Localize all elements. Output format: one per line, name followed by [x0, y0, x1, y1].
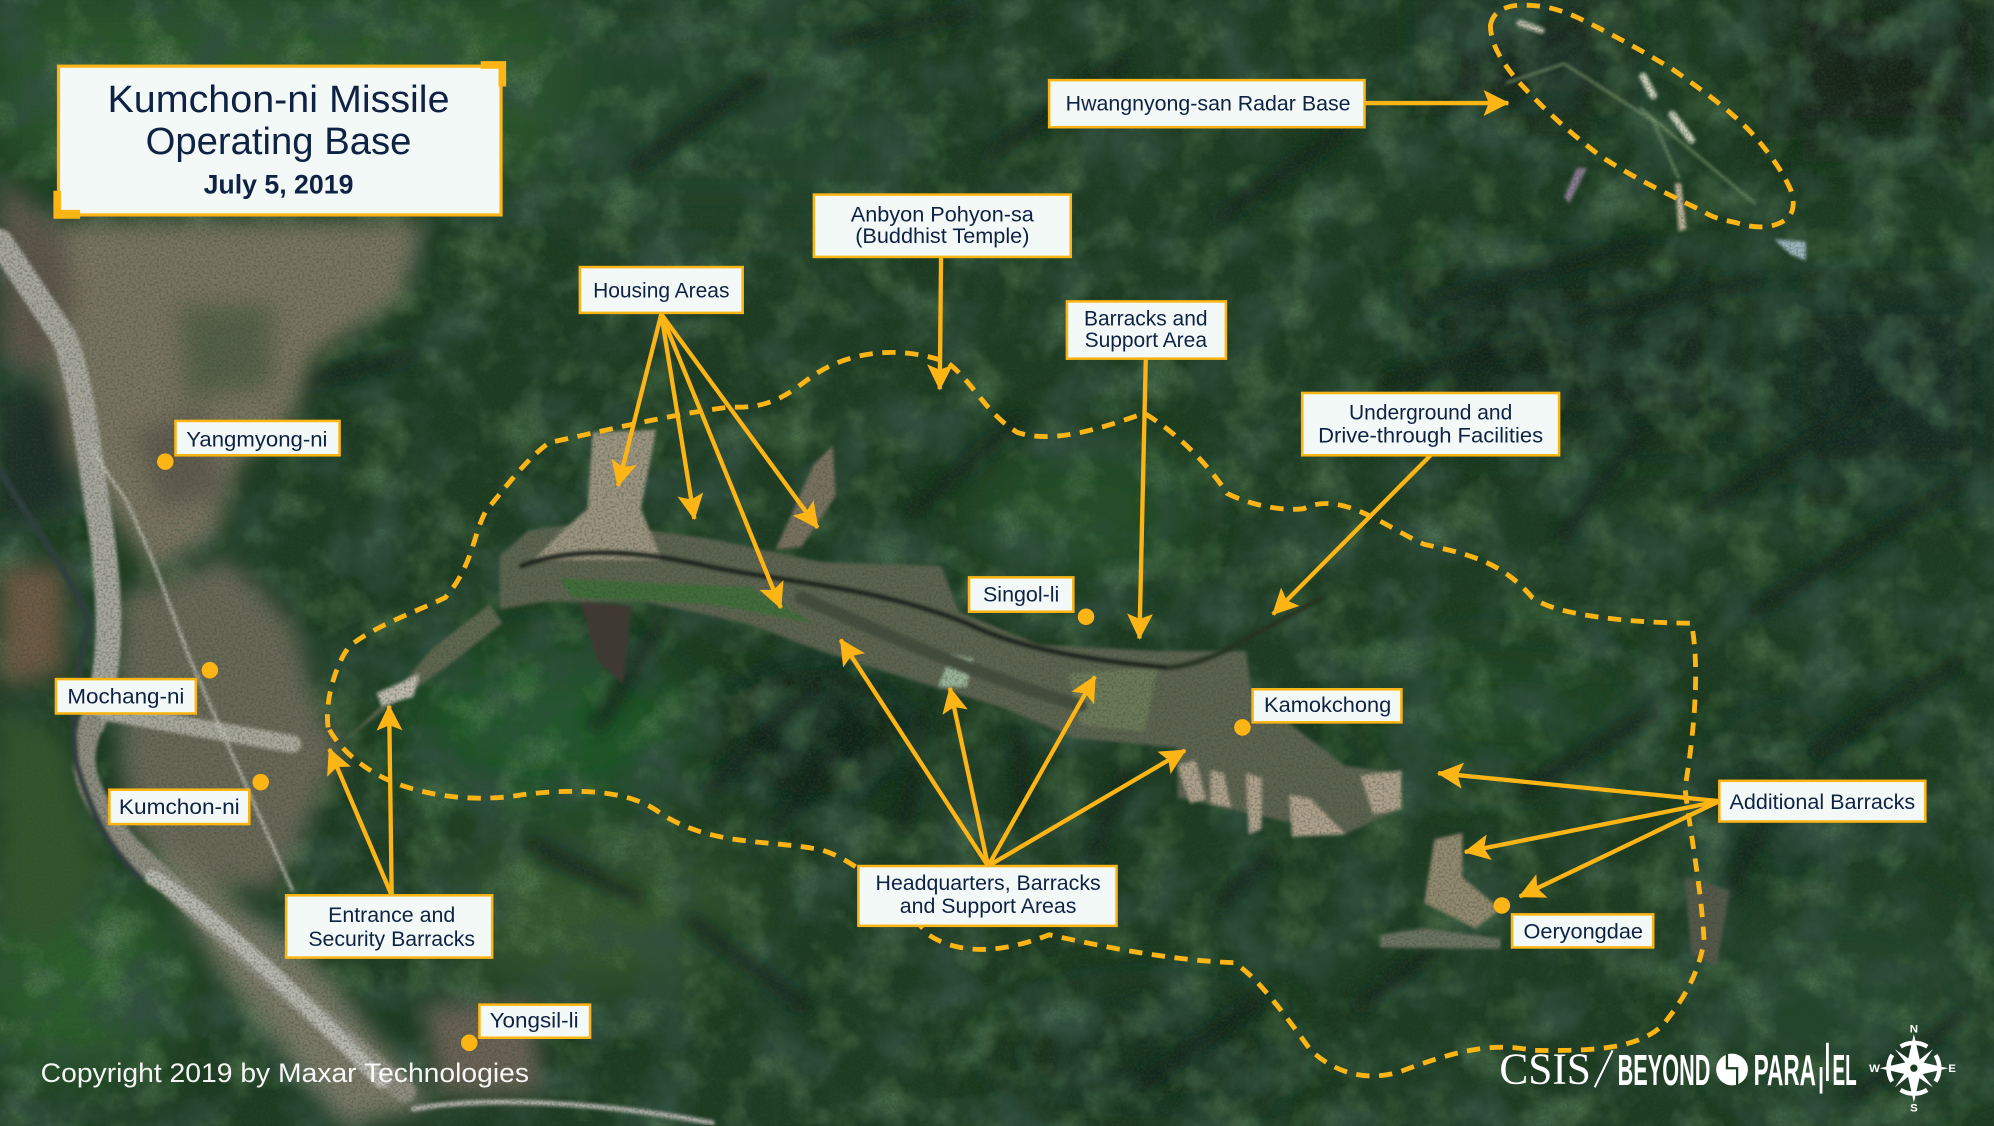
icon: compass rose: N	[1910, 1024, 1918, 1036]
marker: Mochang-ni	[202, 662, 218, 678]
plains and towns on the left	[0, 178, 540, 1125]
boundary: radar base	[1490, 5, 1793, 227]
icon: compass rose	[1869, 1024, 1956, 1114]
arrows: additional barracks	[1438, 773, 1719, 897]
copyright notice: Copyright 2019 by Maxar Technologies	[41, 1058, 529, 1088]
label: Additional Barracks	[1719, 781, 1925, 822]
label: Housing Areas: Housing Areas	[593, 280, 729, 303]
label: Singol-li	[969, 577, 1073, 612]
icon: compass rose: W	[1869, 1063, 1880, 1075]
valley floor	[341, 168, 1806, 967]
label: Underground and Drive-through: Drive-through Facilities	[1318, 425, 1543, 448]
label: Kumchon-ni	[109, 790, 249, 824]
label: Mochang-ni: Mochang-ni	[67, 685, 184, 708]
title panel: July 5, 2019	[204, 169, 353, 199]
label: Kamokchong: Kamokchong	[1264, 694, 1391, 717]
arrow: Hwangnyong-san	[1365, 101, 1508, 105]
arrow: underground	[1273, 455, 1431, 614]
label: Underground and Drive-through: Underground and	[1349, 402, 1512, 425]
logo: CSIS / Beyond Parallel: BEYOND	[1618, 1047, 1710, 1095]
label: Entrance and Security Barracks	[286, 895, 492, 958]
marker: Kamokchong	[1234, 719, 1251, 736]
title panel: Kumchon-ni Missile	[107, 78, 450, 121]
marker: Yongsil-li	[461, 1035, 478, 1051]
label: Kumchon-ni: Kumchon-ni	[119, 796, 240, 819]
arrow: temple	[940, 257, 941, 389]
label: Hwangnyong-san Radar Base	[1049, 80, 1365, 127]
label: Anbyon Pohyon-sa	[814, 195, 1071, 257]
label: Hwangnyong-san Radar Base: Hwangnyong-san Radar Base	[1066, 93, 1351, 116]
label: Anbyon Pohyon-sa: Anbyon Pohyon-sa	[851, 203, 1034, 226]
text: EL	[1832, 1047, 1857, 1095]
icon: compass rose: S	[1910, 1102, 1918, 1114]
logo: CSIS / Beyond Parallel: PARA	[1754, 1047, 1816, 1095]
title panel: Operating Base	[146, 120, 411, 163]
label: Kamokchong	[1253, 689, 1401, 722]
icon: compass rose: E	[1948, 1063, 1956, 1075]
label: Yongsil-li: Yongsil-li	[490, 1010, 579, 1033]
label: Oeryongdae: Oeryongdae	[1523, 921, 1643, 944]
arrow: barracks and support	[1139, 359, 1146, 638]
label: Singol-li: Singol-li	[983, 584, 1059, 607]
label: Yongsil-li	[479, 1005, 590, 1038]
logo: CSIS / Beyond Parallel: CSIS	[1499, 1044, 1591, 1094]
label: Anbyon Pohyon-sa: (Buddhist Temple)	[855, 225, 1029, 248]
logo: CSIS / Beyond Parallel	[1499, 1043, 1857, 1095]
label: Barracks and Support Area	[1067, 301, 1226, 359]
marker: Singol-li	[1078, 609, 1094, 625]
label: Yangmyong-ni: Yangmyong-ni	[186, 428, 327, 451]
label: Underground and Drive-through	[1302, 393, 1559, 455]
marker: Yangmyong-ni	[157, 453, 174, 470]
label: Entrance and Security Barracks: Entrance and	[328, 904, 455, 927]
label: Barracks and Support Area: Barracks and	[1084, 308, 1208, 331]
label: Oeryongdae	[1512, 914, 1653, 947]
label: Barracks and Support Area: Support Area	[1085, 329, 1207, 352]
marker: Oeryongdae	[1494, 897, 1510, 914]
arrows: entrance	[329, 706, 392, 895]
title panel	[53, 61, 506, 219]
label: Entrance and Security Barracks: Security Barracks	[308, 928, 475, 951]
boundary: base perimeter	[327, 352, 1704, 1076]
label: Mochang-ni	[56, 679, 196, 713]
arrows: housing areas	[618, 314, 818, 608]
label: Yangmyong-ni	[175, 421, 340, 455]
shadowed ravines	[305, 13, 1958, 1094]
label: Headquarters: and Support Areas	[900, 895, 1076, 918]
marker: Kumchon-ni	[252, 774, 269, 790]
label: Headquarters	[858, 866, 1117, 926]
arrows: headquarters	[841, 640, 1185, 866]
label: Headquarters: Headquarters, Barracks	[876, 872, 1101, 895]
label: Additional Barracks: Additional Barracks	[1729, 791, 1915, 814]
label: Housing Areas	[580, 267, 743, 313]
